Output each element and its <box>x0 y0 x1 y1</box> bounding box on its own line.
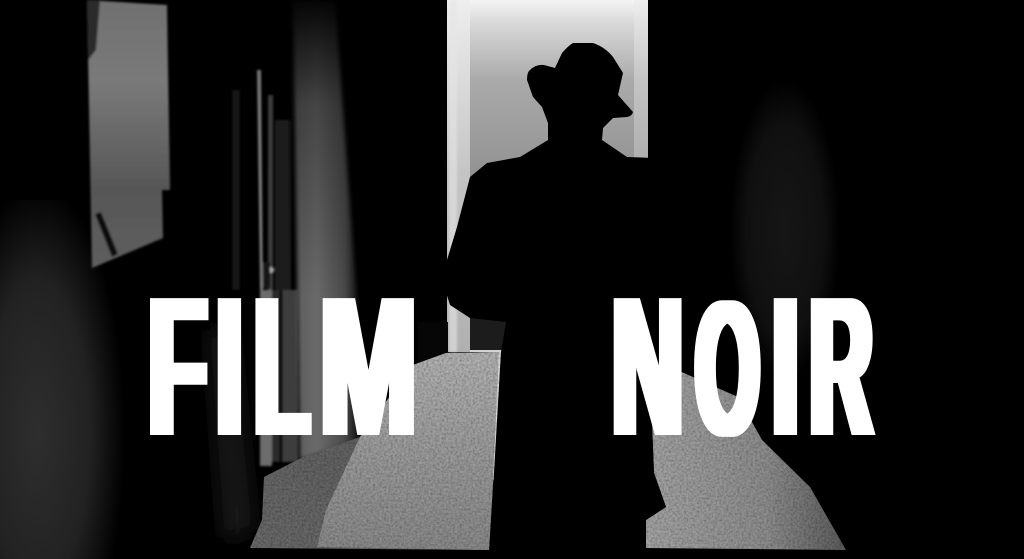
carpeted floor right of figure <box>646 362 846 550</box>
objects at base of doorway <box>418 316 506 362</box>
title: FILM: L <box>254 256 310 478</box>
window on left wall <box>87 0 170 268</box>
title: NOIR: N <box>612 256 683 478</box>
title: NOIR: O <box>696 260 759 476</box>
title: FILM: F <box>149 256 207 478</box>
title: NOIR: I <box>772 256 798 478</box>
lit wall strip <box>288 0 368 460</box>
carpeted floor left of figure <box>250 352 501 550</box>
title: FILM: M <box>320 256 417 478</box>
lit doorway at end of corridor <box>447 0 648 352</box>
left wall glow <box>0 200 252 559</box>
panel: noir hallway poster: R <box>810 256 872 478</box>
silhouette of man in a fedora <box>443 43 666 559</box>
title: FILM: I <box>216 256 242 478</box>
door frame and knob <box>232 70 298 466</box>
right wall texture <box>730 80 840 380</box>
